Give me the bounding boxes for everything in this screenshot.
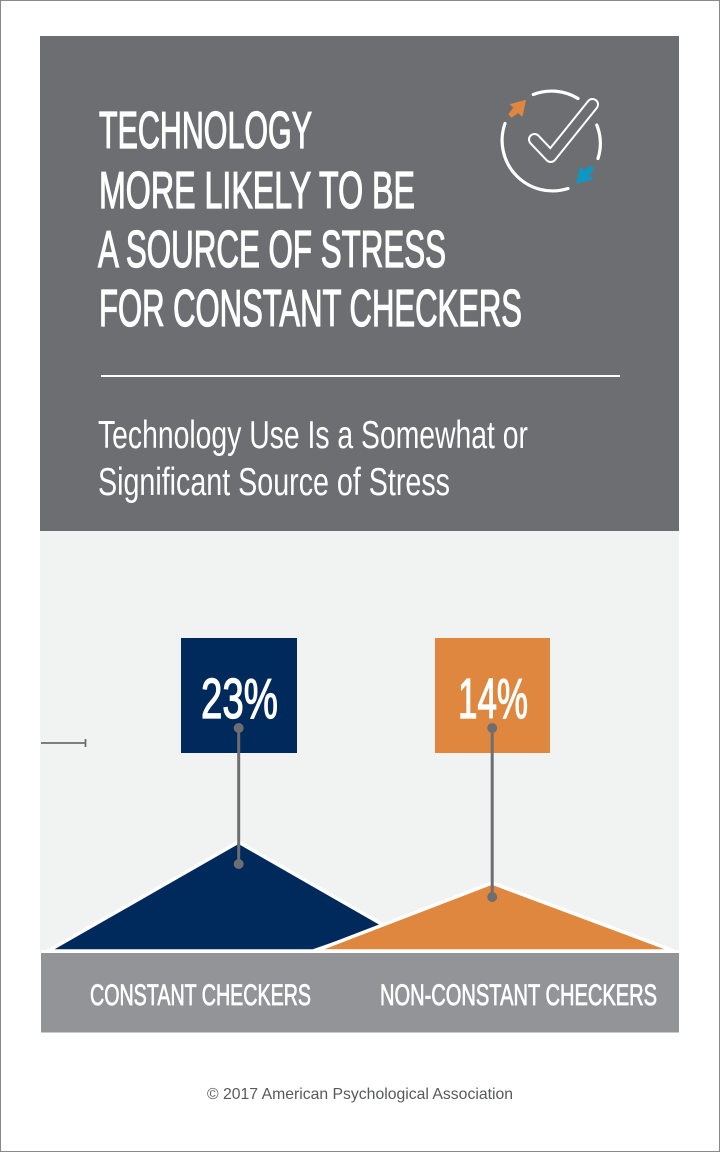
copyright: © 2017 American Psychological Association [207,1086,513,1103]
title [98,102,522,338]
value box: 23% [181,638,297,753]
panel: chart [40,531,679,953]
panel: header [40,36,679,531]
pin: constant checkers [234,723,244,869]
title: A SOURCE OF STRESS [98,221,446,279]
subtitle: Technology Use Is a Somewhat or [98,414,528,457]
triangle: non-constant checkers [315,883,674,951]
label: constant checkers: CONSTANT CHECKERS [90,979,311,1012]
icon: check mark with arrows [502,91,600,191]
axis marker [41,739,86,747]
triangle: constant checkers [48,842,385,951]
value box: 14% [435,638,550,753]
subtitle [98,414,528,504]
label bar [41,953,679,1032]
pin: non-constant checkers [487,723,497,902]
title: MORE LIKELY TO BE [99,162,415,220]
title: TECHNOLOGY [99,102,312,160]
value box: 14%: 14% [458,667,528,731]
subtitle: Significant Source of Stress [98,461,450,504]
value box: 23%: 23% [201,667,278,731]
